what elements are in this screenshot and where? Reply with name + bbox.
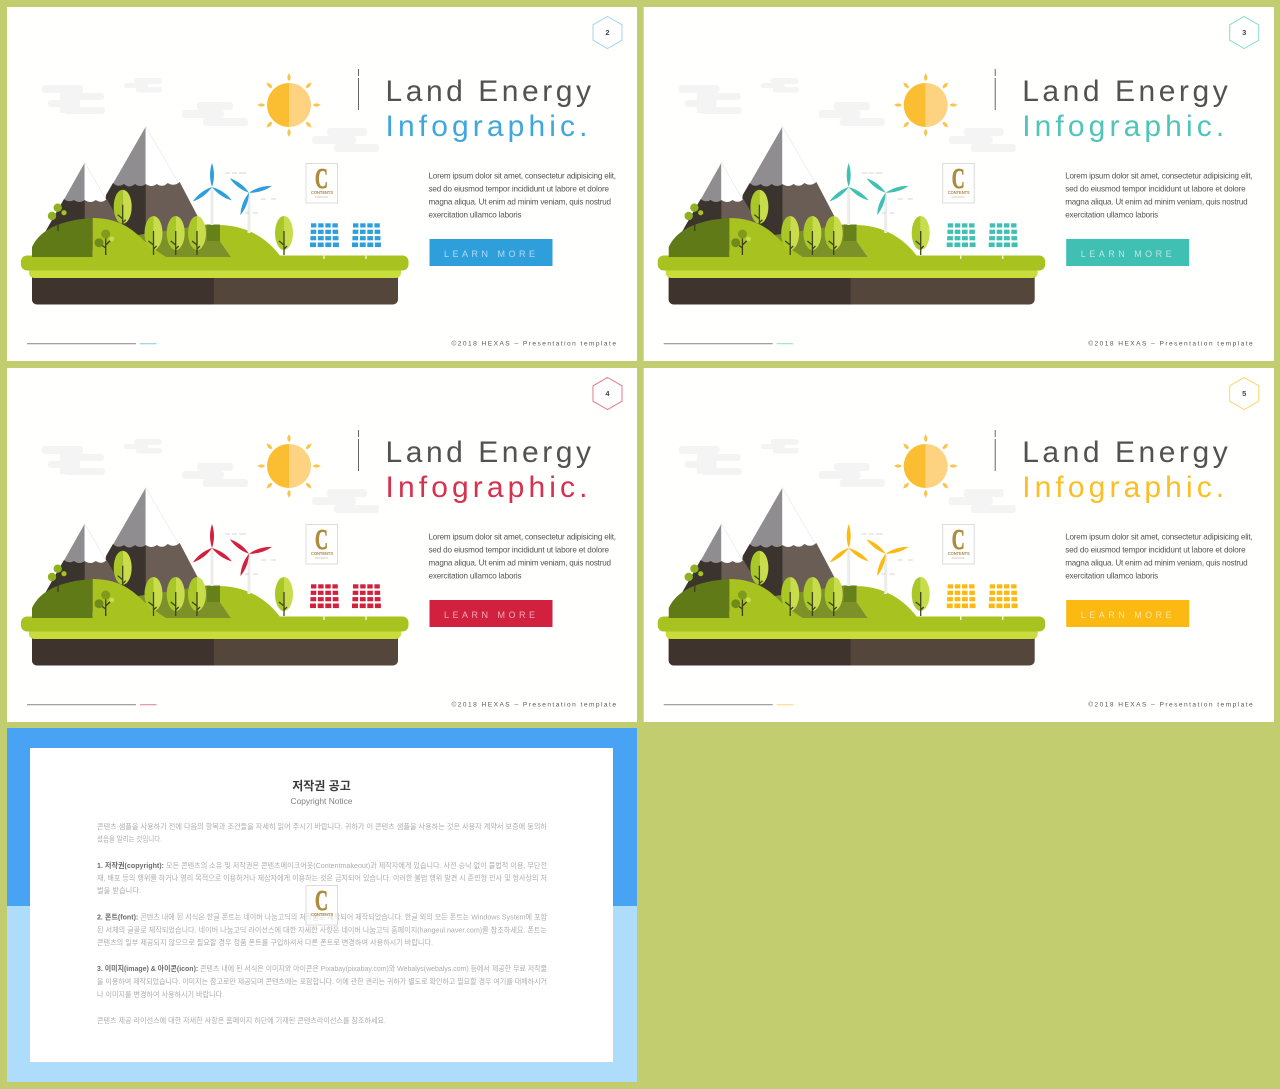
body text xyxy=(428,172,616,220)
body text: exercitation ullamco laboris xyxy=(428,572,522,580)
logo watermark: C xyxy=(315,885,328,917)
page number hexagon xyxy=(593,16,622,48)
button: learn more: LEARN MORE xyxy=(1081,249,1172,259)
illustration: land energy scene xyxy=(21,73,408,304)
section 1: copyright: 벌을 받습니다. xyxy=(97,885,141,895)
body text: Lorem ipsum dolor sit amet, consectetur adipisicing elit, xyxy=(428,532,616,542)
footer copyright: ©2018 HEXAS – Presentation template xyxy=(452,340,616,348)
body text: Lorem ipsum dolor sit amet, consectetur adipisicing elit, xyxy=(1065,532,1253,542)
title xyxy=(386,436,591,504)
illustration: land energy scene xyxy=(658,434,1045,666)
page number hexagon xyxy=(593,378,622,410)
logo watermark: CONTENTS xyxy=(948,551,970,556)
footer copyright: ©2018 HEXAS – Presentation template xyxy=(1088,700,1253,708)
footer copyright: ©2018 HEXAS – Presentation template xyxy=(452,700,616,708)
illustration: land energy scene xyxy=(21,434,408,666)
logo watermark: CONTENTS xyxy=(948,190,970,195)
intro paragraph xyxy=(97,821,547,844)
logo watermark: C xyxy=(952,524,965,556)
body text: exercitation ullamco laboris xyxy=(428,210,522,220)
section 1: copyright: 1. 저작권(copyright): 모든 콘텐츠의 소유 및 저작권은 콘텐츠메이크어웃(Contentmakeout)과 제작자에게 있습니다. 사전 승낙 없이 불법적 이용, 무단전 xyxy=(97,860,547,870)
title divider xyxy=(358,430,360,471)
button: learn more: LEARN MORE xyxy=(1081,610,1172,620)
body text xyxy=(428,532,616,580)
title: Land Energy xyxy=(386,436,591,469)
body text: sed do eiusmod tempor incididunt ut labore et dolore xyxy=(428,546,609,554)
section 2: font: 2. 폰트(font): 콘텐츠 내에 된 서식은 한글 폰트는 네이버 나눔고딕의 저작물로 제작되어 제작되었습니다. 한글 외의 모든 폰트는 Windows System에 포함 xyxy=(97,912,547,922)
section 1: copyright xyxy=(97,860,547,895)
body text: magna aliqua. Ut enim ad minim veniam, quis nostrud xyxy=(1065,198,1248,206)
title xyxy=(1022,75,1228,143)
logo watermark: C xyxy=(315,163,328,195)
button: learn more: LEARN MORE xyxy=(444,610,535,620)
page number hexagon: 2 xyxy=(605,28,610,37)
logo watermark: CONTENTS xyxy=(311,551,333,556)
logo watermark xyxy=(943,524,974,564)
button: learn more xyxy=(1066,239,1189,266)
title: Land Energy xyxy=(386,75,591,108)
section 2: font: 된 서체의 글꼴로 제작되었습니다. 네이버 나눔고딕 라이선스에 대한 자세한 사항은 네이버 나눔고딕 홈페이지(hangeul.naver.com)를 참조하세요. 폰트는 xyxy=(97,924,547,934)
logo watermark: CONTENTS xyxy=(311,912,333,917)
button: learn more xyxy=(430,600,552,627)
closing line: 콘텐츠 제공 라이선스에 대한 자세한 사항은 홈페이지 하단에 기재된 콘텐츠라이선스를 참조하세요. xyxy=(97,1015,386,1025)
title xyxy=(386,75,591,143)
body text: exercitation ullamco laboris xyxy=(1065,572,1158,580)
body text: Lorem ipsum dolor sit amet, consectetur adipisicing elit, xyxy=(1065,172,1253,180)
title: Land Energy xyxy=(1022,75,1228,108)
section 2: font: 콘텐츠의 일부 제공되지 않으므로 필요할 경우 정품 폰트를 구입하셔서 다른 폰트로 변경하여 사용하시기 바랍니다. xyxy=(97,937,433,947)
page number hexagon: 3 xyxy=(1242,28,1246,37)
section 2: font xyxy=(97,912,547,947)
page number hexagon xyxy=(1230,16,1259,48)
title: Infographic. xyxy=(386,110,588,143)
logo watermark: CONTENTS xyxy=(311,190,333,195)
button: learn more: LEARN MORE xyxy=(444,249,535,259)
panel: slide 4 red xyxy=(7,368,637,722)
title divider xyxy=(358,69,360,110)
logo watermark xyxy=(306,524,338,564)
heading: copyright notice xyxy=(291,778,353,806)
title divider xyxy=(994,430,996,471)
logo watermark: C xyxy=(315,524,328,556)
body text: sed do eiusmod tempor incididunt ut labore et dolore xyxy=(1065,546,1246,554)
button: learn more xyxy=(430,239,552,266)
page number hexagon: 4 xyxy=(605,389,610,398)
section 3: image and icon: 나 이미지를 변경하여 사용하시기 바랍니다. xyxy=(97,989,224,999)
panel: slide 2 blue xyxy=(7,7,637,361)
intro paragraph: 콘텐츠 샘플을 사용하기 전에 다음의 항목과 조건들을 자세히 읽어 주시기 바랍니다. 귀하가 이 콘텐츠 샘플을 사용하는 것은 사용자 계약서 보증에 동의하 xyxy=(97,821,547,831)
logo watermark xyxy=(306,885,338,925)
section 3: image and icon: 을 이용하여 제작되었습니다. 이미지는 참고로만 제공되며 콘텐츠에는 포함합니다. 이에 관한 권리는 귀하가 별도로 확인하고 필요할 경우 여기를 대체하시거 xyxy=(97,976,547,986)
panel: copyright notice xyxy=(7,728,637,1082)
panel: slide 3 teal xyxy=(644,7,1274,361)
body text xyxy=(1065,532,1253,580)
logo watermark xyxy=(943,163,974,203)
footer copyright: ©2018 HEXAS – Presentation template xyxy=(1088,340,1253,348)
title: Land Energy xyxy=(1022,436,1228,469)
footer line xyxy=(664,343,793,344)
heading: copyright notice: 저작권 공고 xyxy=(292,778,351,793)
section 3: image and icon xyxy=(97,963,547,999)
section 3: image and icon: 3. 이미지(image) & 아이콘(icon): 콘텐츠 내에 된 서식은 이미지와 아이콘은 Pixabay(pixabay.com)와 Webalys(webalys.com) 등에서 제공한 무료 저작물 xyxy=(97,963,547,973)
title: Infographic. xyxy=(1022,110,1224,143)
body text: magna aliqua. Ut enim ad minim veniam, quis nostrud xyxy=(428,198,611,206)
logo watermark xyxy=(306,163,338,203)
title: Infographic. xyxy=(1022,471,1224,504)
heading: copyright notice: Copyright Notice xyxy=(291,796,353,806)
illustration: land energy scene xyxy=(658,73,1045,304)
title xyxy=(1022,436,1228,504)
title: Infographic. xyxy=(386,471,588,504)
button: learn more xyxy=(1066,600,1189,627)
body text: magna aliqua. Ut enim ad minim veniam, quis nostrud xyxy=(1065,558,1248,568)
page number hexagon: 5 xyxy=(1242,389,1246,398)
body text xyxy=(1065,172,1253,220)
body text: sed do eiusmod tempor incididunt ut labore et dolore xyxy=(428,184,609,194)
logo watermark: C xyxy=(952,163,965,195)
intro paragraph: 셨음을 알리는 것입니다. xyxy=(97,834,162,844)
title divider xyxy=(994,69,996,110)
panel: slide 5 yellow xyxy=(644,368,1274,722)
section 1: copyright: 재, 배포 등의 행위를 하거나 영리 목적으로 이용하거나 제삼자에게 이용하는 것은 금지되어 있습니다. 이러한 불법 행위 발견 시 준민형 민사 및 형사상의 처 xyxy=(97,872,547,882)
footer line xyxy=(27,704,156,705)
page number hexagon xyxy=(1230,378,1259,410)
body text: sed do eiusmod tempor incididunt ut labore et dolore xyxy=(1065,184,1246,194)
footer line xyxy=(27,343,156,344)
body text: Lorem ipsum dolor sit amet, consectetur adipisicing elit, xyxy=(428,172,616,180)
footer line xyxy=(664,704,793,705)
body text: magna aliqua. Ut enim ad minim veniam, quis nostrud xyxy=(428,558,611,568)
body text: exercitation ullamco laboris xyxy=(1065,210,1158,220)
